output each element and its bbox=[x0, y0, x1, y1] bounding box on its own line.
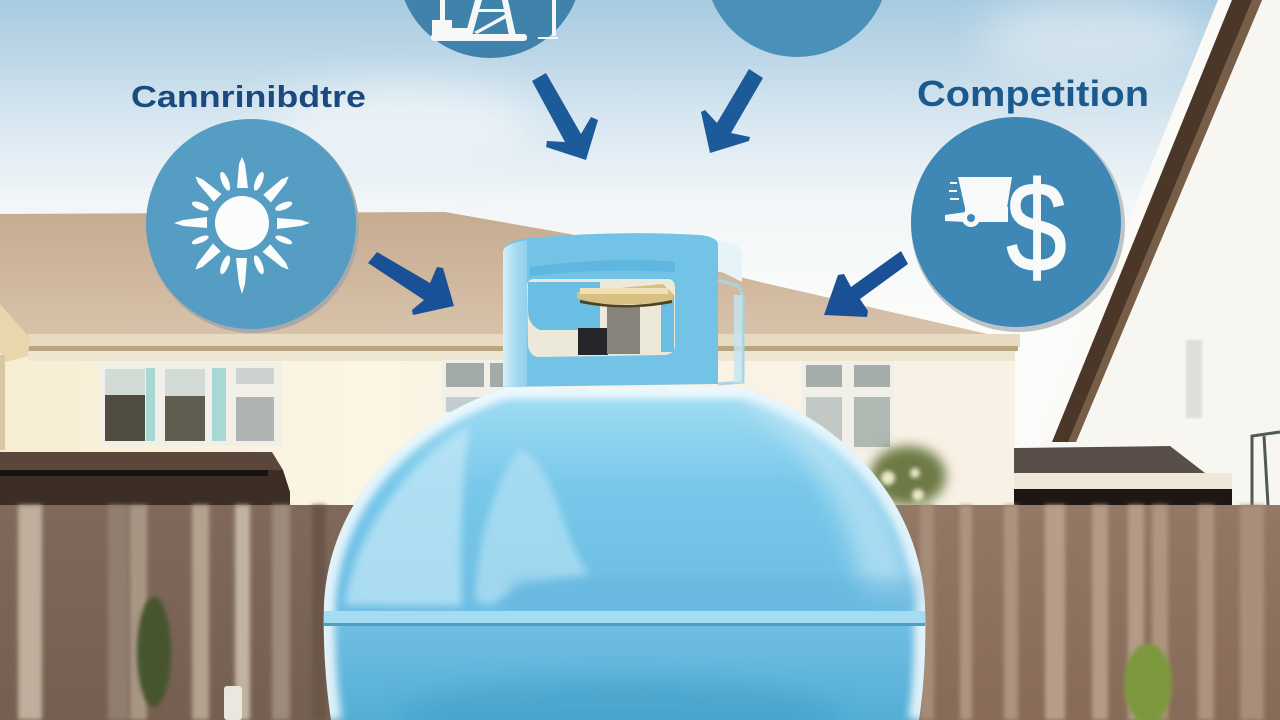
tank collar bbox=[503, 233, 743, 387]
background: neighbouring house bbox=[1014, 0, 1280, 510]
post bbox=[224, 686, 242, 720]
factor circle: crude oil bbox=[398, 0, 582, 58]
label: garbled heading left: Cannrinibdtre bbox=[131, 79, 366, 114]
arrow: weather to tank bbox=[368, 252, 454, 315]
background: wooden fence bbox=[0, 505, 1280, 720]
icon: delivery truck bbox=[945, 177, 1012, 227]
background: house bbox=[0, 212, 1020, 510]
awning bbox=[0, 452, 283, 470]
label: competition: Competition bbox=[917, 73, 1149, 114]
arrow: top right to tank bbox=[701, 69, 763, 153]
tank body bbox=[324, 388, 925, 720]
plant right bbox=[1124, 644, 1172, 720]
factor circle: top right bbox=[705, 0, 889, 57]
factor circle: weather bbox=[146, 119, 359, 333]
windows bbox=[100, 360, 894, 453]
icon: oil derrick bbox=[431, 0, 558, 41]
icon: sun bbox=[174, 157, 310, 294]
shrub bbox=[870, 446, 946, 506]
icon: dollar sign: $ bbox=[1006, 156, 1067, 299]
arrow: oil to tank bbox=[532, 73, 598, 160]
factor circle: competition bbox=[911, 117, 1125, 332]
propane tank bbox=[324, 233, 925, 720]
arrow: competition to tank bbox=[824, 251, 908, 317]
plant left bbox=[137, 597, 171, 707]
